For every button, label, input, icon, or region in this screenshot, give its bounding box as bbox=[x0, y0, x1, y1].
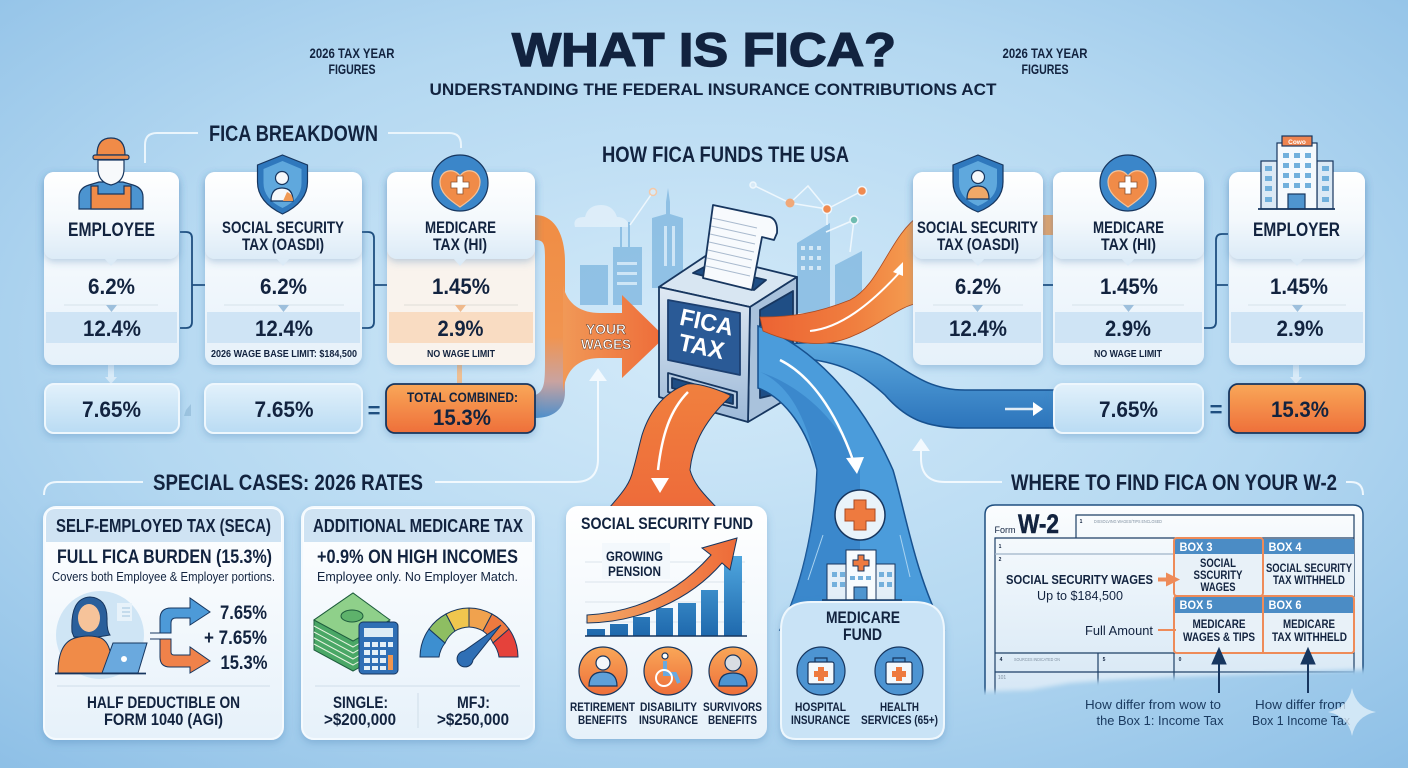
box headers: BOX 4 bbox=[1268, 540, 1302, 554]
right year tag: 2026 TAX YEAR bbox=[1002, 45, 1088, 61]
notes under form: How differ from bbox=[1255, 697, 1346, 712]
panel: self-employed tax: SELF-EMPLOYED TAX (SECA) bbox=[56, 516, 271, 536]
W-2 form: Full Amount bbox=[1085, 623, 1153, 638]
panel: medicare fund: MEDICARE bbox=[826, 608, 900, 627]
W-2 form: 4 bbox=[1000, 657, 1003, 663]
W-2 form: 101 bbox=[998, 675, 1006, 681]
icon: survivors bbox=[709, 647, 757, 695]
card: social security left: 12.4% bbox=[255, 316, 313, 341]
card: employer bbox=[1229, 136, 1365, 365]
flow: your wages arrow: YOUR bbox=[586, 322, 626, 337]
thin white connectors bbox=[435, 370, 1002, 482]
notes under form: Box 1 Income Tax bbox=[1252, 713, 1350, 728]
panel: self-employed tax: 15.3% bbox=[220, 653, 268, 674]
employee share total bbox=[45, 384, 179, 433]
panel: additional medicare tax: Employee only. No Employer Match. bbox=[317, 569, 518, 584]
card: employee: 12.4% bbox=[83, 316, 141, 341]
W-2 form: MEDICARE bbox=[1283, 619, 1335, 631]
W-2 form: SOURCES INDICATED ON bbox=[1014, 657, 1060, 662]
W-2 form: W-2 bbox=[1018, 509, 1059, 539]
icon: worker bbox=[79, 138, 143, 209]
small connectors bbox=[105, 215, 1302, 416]
employee share total: 7.65% bbox=[82, 397, 141, 422]
card: social security right: 6.2% bbox=[955, 274, 1001, 299]
arrow: full amount to box 5 bbox=[1158, 629, 1176, 631]
card: medicare right: MEDICARE bbox=[1093, 219, 1164, 237]
heading: where to find FICA: WHERE TO FIND FICA ON YOUR W-2 bbox=[1011, 470, 1337, 495]
W-2 form: 2 bbox=[999, 557, 1002, 563]
card: medicare right: 1.45% bbox=[1100, 274, 1158, 299]
panel: additional medicare tax: ADDITIONAL MEDICARE TAX bbox=[313, 516, 523, 536]
share total right bbox=[1054, 384, 1203, 433]
total combined: 15.3% bbox=[433, 405, 491, 430]
icon: medical cross bbox=[835, 490, 885, 540]
box label: FICA bbox=[677, 304, 736, 342]
heading: how FICA funds the USA: HOW FICA FUNDS THE USA bbox=[602, 142, 849, 167]
panel: self-employed tax: HALF DEDUCTIBLE ON bbox=[87, 693, 240, 712]
W-2 form: SOCIAL bbox=[1200, 558, 1236, 570]
panel: social security fund: DISABILITY bbox=[640, 702, 697, 714]
card: social security left: 6.2% bbox=[260, 274, 307, 299]
panel: social security fund: SURVIVORS bbox=[703, 702, 762, 714]
box headers: BOX 5 bbox=[1180, 598, 1213, 612]
card: medicare right: TAX (HI) bbox=[1101, 236, 1156, 254]
left year tag: FIGURES bbox=[328, 61, 376, 77]
total right: 15.3% bbox=[1271, 397, 1329, 422]
heading: FICA breakdown bbox=[145, 121, 461, 163]
icon: heart bbox=[432, 155, 488, 211]
highlighted orange outlines bbox=[1174, 538, 1354, 653]
chart: growing pension: PENSION bbox=[608, 564, 661, 579]
card: employer: EMPLOYER bbox=[1253, 220, 1340, 241]
right year tag: FIGURES bbox=[1022, 61, 1068, 77]
icon: woman at laptop bbox=[55, 591, 147, 679]
W-2 form: 1 bbox=[999, 544, 1002, 550]
panel: social security fund bbox=[566, 506, 767, 739]
card: medicare left: NO WAGE LIMIT bbox=[427, 348, 495, 360]
card: social security left: TAX (OASDI) bbox=[242, 236, 324, 254]
W-2 form: DISSOLVING WAGES/TIPS ENCLOSED bbox=[1094, 519, 1163, 524]
panel: medicare fund: FUND bbox=[843, 625, 882, 644]
panel: additional medicare tax bbox=[302, 507, 534, 739]
flow: orange to employer side bbox=[760, 215, 920, 344]
panel: medicare fund: SERVICES (65+) bbox=[861, 715, 938, 727]
right year tag bbox=[1002, 45, 1088, 77]
chart: growing pension: GROWING bbox=[606, 549, 663, 564]
W-2 form: TAX WITHHELD bbox=[1273, 575, 1345, 587]
left year tag: 2026 TAX YEAR bbox=[310, 45, 394, 61]
card: medicare left: 2.9% bbox=[438, 316, 484, 341]
card: social security left: 2026 WAGE BASE LIMIT: $184,500 bbox=[211, 348, 357, 360]
city skyline backdrop bbox=[574, 188, 862, 313]
panel: medicare fund: HEALTH bbox=[880, 702, 919, 714]
brackets between cards bbox=[180, 232, 1228, 328]
icon: office building bbox=[1258, 136, 1335, 209]
panel: social security fund: BENEFITS bbox=[708, 715, 757, 727]
icon: retirement bbox=[579, 647, 627, 695]
W-2 form: SOCIAL SECURITY bbox=[1266, 563, 1352, 575]
panel: self-employed tax: FULL FICA BURDEN (15.3%) bbox=[57, 547, 272, 568]
card: employer: 1.45% bbox=[1270, 274, 1328, 299]
W-2 form: 5 bbox=[1103, 657, 1106, 663]
icon: hospital insurance bbox=[797, 647, 845, 695]
card: social security right bbox=[913, 155, 1043, 365]
panel: additional medicare tax: +0.9% ON HIGH INCOMES bbox=[317, 547, 518, 568]
icon: shield bbox=[953, 155, 1003, 212]
employer share total left bbox=[205, 384, 362, 433]
panel: additional medicare tax: >$250,000 bbox=[437, 710, 509, 729]
equals sign left: = bbox=[368, 398, 380, 423]
flow: blue to employer side bbox=[780, 342, 1056, 428]
card: employee: EMPLOYEE bbox=[68, 220, 155, 241]
panel: social security fund: INSURANCE bbox=[639, 715, 698, 727]
W-2 form: Form bbox=[994, 525, 1016, 535]
paper receipt bbox=[703, 205, 777, 290]
card: social security right: TAX (OASDI) bbox=[937, 236, 1019, 254]
heading: special cases: SPECIAL CASES: 2026 RATES bbox=[153, 470, 423, 495]
FICA tax box bbox=[659, 205, 797, 422]
W-2 form: TAX WITHHELD bbox=[1272, 632, 1347, 644]
notes under form: How differ from wow to bbox=[1085, 697, 1221, 712]
card: social security right: 12.4% bbox=[949, 316, 1007, 341]
card: social security left: SOCIAL SECURITY bbox=[222, 219, 344, 237]
card: employer: 2.9% bbox=[1276, 316, 1324, 341]
card: employee: 6.2% bbox=[88, 274, 135, 299]
W-2 form bbox=[985, 505, 1363, 695]
card: medicare left: 1.45% bbox=[432, 274, 490, 299]
card: medicare left: TAX (HI) bbox=[433, 236, 487, 254]
icon: health services bbox=[875, 647, 923, 695]
screen bbox=[668, 300, 740, 375]
panel: social security fund: BENEFITS bbox=[578, 715, 627, 727]
icon: cash stack and calculator bbox=[314, 593, 398, 674]
card: medicare right: NO WAGE LIMIT bbox=[1094, 348, 1162, 360]
flow: orange to Social Security fund bbox=[610, 384, 730, 507]
total right bbox=[1229, 384, 1365, 433]
sparkle bbox=[1328, 688, 1376, 736]
panel: self-employed tax: FORM 1040 (AGI) bbox=[104, 710, 223, 729]
total combined bbox=[386, 384, 535, 433]
icon: hospital bbox=[822, 550, 902, 600]
flow: your wages arrow: WAGES bbox=[581, 337, 631, 352]
panel: additional medicare tax: >$200,000 bbox=[324, 710, 396, 729]
panel: medicare fund bbox=[781, 602, 944, 739]
total combined: TOTAL COMBINED: bbox=[407, 389, 518, 405]
icon: shield bbox=[258, 155, 308, 214]
icon: office building: Cowo bbox=[1288, 139, 1306, 146]
flow: blue to Medicare fund bbox=[758, 326, 944, 630]
card: medicare right bbox=[1053, 155, 1204, 365]
icon: heart bbox=[1100, 155, 1156, 211]
equals sign right: = bbox=[1210, 397, 1222, 422]
W-2 form: Up to $184,500 bbox=[1037, 588, 1123, 603]
card: social security left bbox=[205, 155, 362, 365]
W-2 form: WAGES & TIPS bbox=[1183, 632, 1255, 644]
W-2 form: 1 bbox=[1080, 519, 1083, 525]
W-2 form: WAGES bbox=[1200, 582, 1236, 594]
panel: medicare fund: INSURANCE bbox=[791, 715, 850, 727]
W-2 form: 0 bbox=[1179, 657, 1182, 663]
panel: medicare fund: HOSPITAL bbox=[795, 702, 846, 714]
box label: TAX bbox=[676, 329, 727, 365]
card: employee bbox=[44, 138, 179, 365]
heading: FICA breakdown: FICA BREAKDOWN bbox=[209, 121, 378, 146]
box headers bbox=[1174, 539, 1354, 653]
W-2 form: SOCIAL SECURITY WAGES bbox=[1006, 572, 1153, 587]
icon: split arrows bbox=[150, 598, 210, 673]
network nodes bbox=[630, 182, 866, 252]
panel: self-employed tax: 7.65% bbox=[220, 603, 267, 624]
card: medicare left: MEDICARE bbox=[425, 219, 496, 237]
arrows under boxes bbox=[1212, 648, 1315, 693]
title block bbox=[310, 23, 1088, 99]
panel: social security fund: RETIREMENT bbox=[570, 702, 635, 714]
card: medicare right: 2.9% bbox=[1105, 316, 1151, 341]
icon: disability bbox=[644, 647, 692, 695]
W-2 form: SSCURITY bbox=[1194, 570, 1243, 582]
share total right: 7.65% bbox=[1099, 397, 1158, 422]
notes under form: the Box 1: Income Tax bbox=[1096, 713, 1224, 728]
left year tag bbox=[310, 45, 394, 77]
flow: your wages arrow bbox=[535, 215, 665, 418]
chart: growing pension bbox=[585, 538, 747, 636]
notes under form bbox=[1085, 697, 1350, 728]
arrow: wages to box 3 bbox=[1158, 572, 1180, 586]
box headers: BOX 6 bbox=[1268, 598, 1302, 612]
employer share total left: 7.65% bbox=[254, 397, 314, 422]
card: social security right: SOCIAL SECURITY bbox=[917, 219, 1038, 237]
W-2 form: MEDICARE bbox=[1192, 619, 1246, 631]
panel: social security fund: SOCIAL SECURITY FUND bbox=[581, 514, 753, 533]
subtitle: UNDERSTANDING THE FEDERAL INSURANCE CONTRIBUTIONS ACT bbox=[430, 80, 997, 99]
panel: additional medicare tax: SINGLE: bbox=[333, 693, 388, 712]
heading: special cases bbox=[44, 470, 423, 495]
panel: self-employed tax: Covers both Employee & Employer portions. bbox=[52, 569, 275, 584]
icon: gauge bbox=[420, 608, 518, 667]
box label bbox=[672, 304, 736, 366]
card: medicare left bbox=[387, 155, 535, 365]
panel: additional medicare tax: MFJ: bbox=[457, 693, 490, 712]
box headers: BOX 3 bbox=[1180, 540, 1213, 554]
panel: self-employed tax: + 7.65% bbox=[204, 628, 267, 649]
title: WHAT IS FICA? bbox=[512, 23, 896, 76]
panel: self-employed tax bbox=[44, 507, 283, 739]
